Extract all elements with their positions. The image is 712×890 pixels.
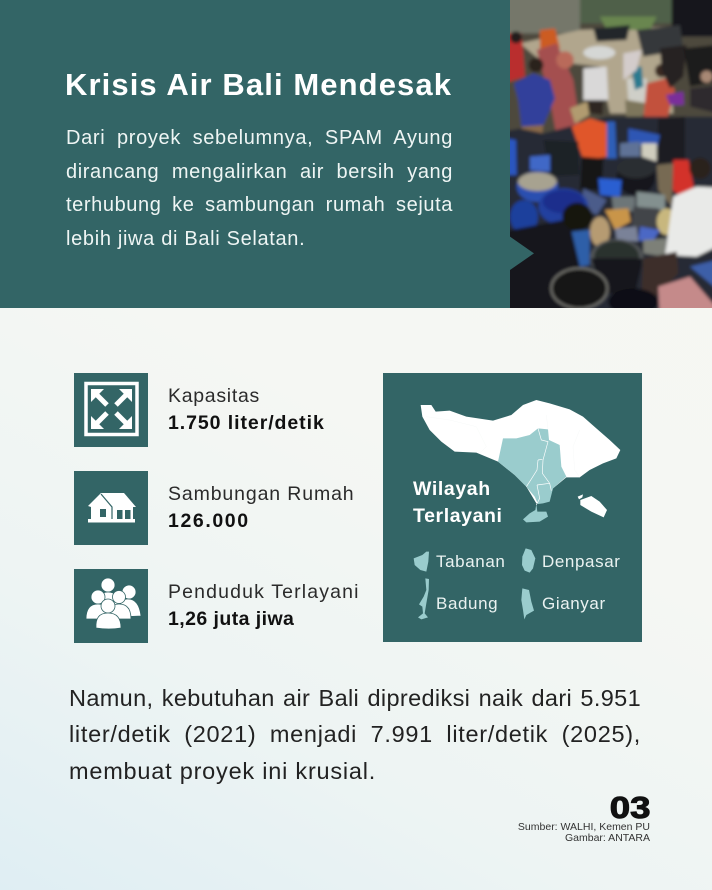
intro text: dirancang mengalirkan air bersih yang <box>66 161 453 183</box>
source credits: Gambar: ANTARA <box>565 832 650 844</box>
source credits <box>518 821 650 844</box>
legend shape: tabanan <box>414 552 429 572</box>
stat: kapasitas: 1.750 liter/detik <box>168 412 325 434</box>
legend labels: Denpasar <box>542 552 621 571</box>
intro text: Dari proyek sebelumnya, SPAM Ayung <box>66 127 453 149</box>
legend shape: gianyar <box>521 588 534 619</box>
stat: penduduk terlayani: 1,26 juta jiwa <box>168 608 294 630</box>
intro text: terhubung ke sambungan rumah sejuta <box>66 194 453 216</box>
stat: sambungan rumah <box>74 471 354 545</box>
title: Krisis Air Bali Mendesak <box>65 67 452 102</box>
panel: wilayah terlayani map <box>383 373 642 642</box>
source credits: Sumber: WALHI, Kemen PU <box>518 821 650 833</box>
closing paragraph: liter/detik (2021) menjadi 7.991 liter/detik (2025), <box>69 721 641 747</box>
intro text <box>66 127 453 250</box>
legend labels <box>436 552 621 613</box>
closing paragraph <box>69 685 641 784</box>
icon: group of people <box>74 569 148 643</box>
stat: sambungan rumah: Sambungan Rumah <box>168 483 354 505</box>
icon: expand arrows <box>74 373 148 447</box>
map of Bali <box>414 400 620 620</box>
legend labels: Tabanan <box>436 552 505 571</box>
photo: crowd collecting water in containers <box>510 0 712 308</box>
map heading: Wilayah Terlayani <box>413 478 503 527</box>
closing paragraph: membuat proyek ini krusial. <box>69 758 376 784</box>
stat: penduduk terlayani: Penduduk Terlayani <box>168 581 360 603</box>
legend labels: Gianyar <box>542 594 606 613</box>
icon: house <box>74 471 148 545</box>
intro text: lebih jiwa di Bali Selatan. <box>66 228 305 250</box>
header panel <box>0 0 510 308</box>
legend shape: badung <box>418 578 429 619</box>
stat: sambungan rumah: 126.000 <box>168 510 250 532</box>
page number: 03 <box>609 790 650 825</box>
legend shape: denpasar <box>522 548 535 573</box>
stat: kapasitas: Kapasitas <box>168 385 260 407</box>
stat: kapasitas <box>74 373 325 447</box>
closing paragraph: Namun, kebutuhan air Bali diprediksi naik dari 5.951 <box>69 685 641 711</box>
stat: penduduk terlayani <box>74 569 360 643</box>
legend labels: Badung <box>436 594 498 613</box>
